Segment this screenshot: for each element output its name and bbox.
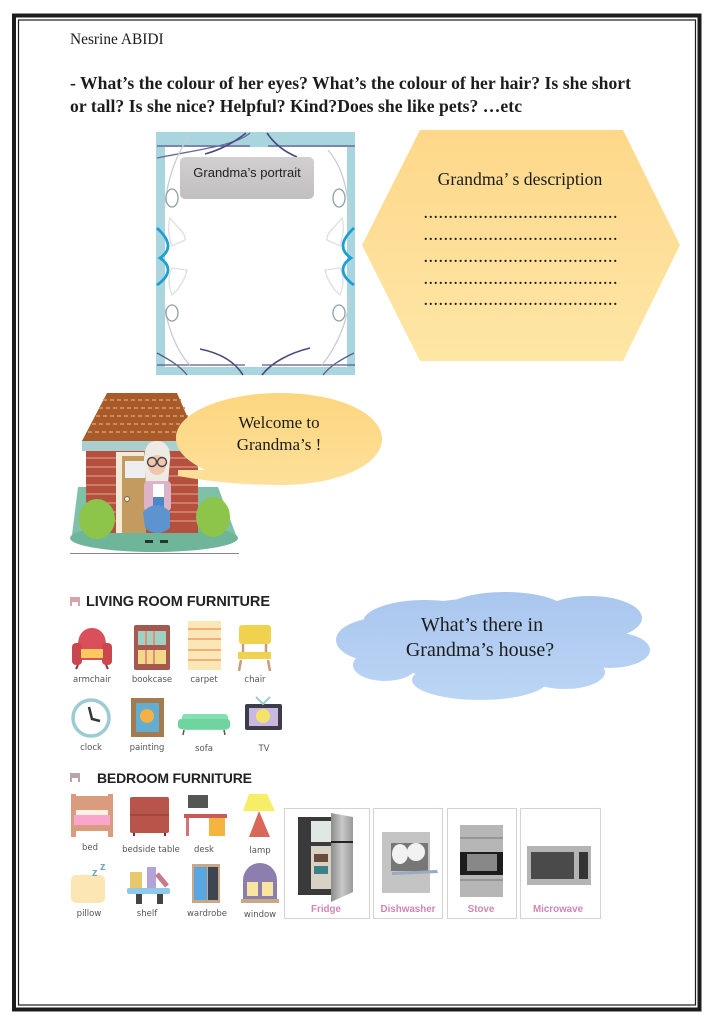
panel: grandma's description hexagon xyxy=(362,130,680,361)
author name: Nesrine ABIDI xyxy=(70,31,164,48)
illustration: grandma xyxy=(143,441,171,543)
panel: grandma's portrait frame xyxy=(156,132,355,375)
icon: bedside table xyxy=(130,797,169,836)
panel: bedroom items: lamp xyxy=(249,846,271,856)
panel: grandma's description hexagon: ....................................... xyxy=(424,229,617,244)
cloud: what's there: Grandma’s house? xyxy=(406,639,554,661)
panel: grandma's description hexagon: ....................................... xyxy=(424,294,617,309)
cloud: what's there xyxy=(336,592,650,700)
panel: living room items: clock xyxy=(80,743,102,753)
icon: bookcase xyxy=(134,625,170,670)
panel: fridge card: Fridge xyxy=(311,904,342,915)
panel: bedroom items: wardrobe xyxy=(187,909,227,919)
speech bubble: welcome: Grandma’s ! xyxy=(237,435,321,454)
icon: wardrobe xyxy=(192,864,220,903)
panel: grandma's description hexagon: ....................................... xyxy=(424,273,617,288)
icon: window xyxy=(241,863,279,903)
speech bubble: welcome: Welcome to xyxy=(238,413,320,432)
panel: dishwasher card xyxy=(374,808,442,918)
panel: living room items: sofa xyxy=(195,744,213,754)
question text: - What’s the colour of her eyes? What’s the colour of her hair? Is she short xyxy=(70,73,631,93)
panel: dishwasher card: Dishwasher xyxy=(380,904,436,915)
portrait label xyxy=(180,157,314,199)
icon: pillow: z xyxy=(92,867,98,879)
panel: bedroom items: desk xyxy=(194,845,214,855)
panel: bedroom items xyxy=(71,794,279,920)
panel: bedroom items: shelf xyxy=(137,909,158,919)
panel: grandma's description hexagon: ....................................... xyxy=(424,207,617,222)
panel: living room items: chair xyxy=(244,675,266,685)
icon: sofa xyxy=(178,714,230,735)
speech bubble: welcome xyxy=(176,393,382,485)
panel: stove card: Stove xyxy=(468,904,495,915)
icon: desk xyxy=(184,795,227,836)
icon: pillow: z xyxy=(100,861,106,873)
heading: bedroom furniture: BEDROOM FURNITURE xyxy=(97,770,252,786)
panel: bedroom items: bed xyxy=(82,843,98,853)
icon: shelf xyxy=(127,867,170,904)
panel: living room items: armchair xyxy=(73,675,111,685)
panel: bedroom items: window xyxy=(244,910,276,920)
panel: living room items: TV xyxy=(257,744,270,754)
icon: TV xyxy=(245,697,282,730)
icon: bed xyxy=(71,794,113,837)
panel: living room items: painting xyxy=(130,743,164,753)
portrait label: Grandma’s portrait xyxy=(193,165,301,180)
question text xyxy=(70,73,631,116)
panel: bedroom items: bedside table xyxy=(122,845,180,855)
icon: carpet xyxy=(188,621,221,670)
panel: fridge card xyxy=(284,808,370,918)
question text: or tall? Is she nice? Helpful? Kind?Does she like pets? …etc xyxy=(70,96,522,116)
panel: microwave card xyxy=(520,808,600,918)
cloud: what's there: What’s there in xyxy=(421,614,543,636)
panel: grandma's description hexagon: Grandma’ s description xyxy=(438,169,603,189)
panel: bedroom items: pillow xyxy=(77,909,101,919)
panel: microwave card: Microwave xyxy=(533,904,584,915)
icon: painting xyxy=(131,698,164,737)
icon: clock xyxy=(73,700,109,736)
icon: armchair xyxy=(72,628,112,669)
icon: chair xyxy=(238,625,271,671)
panel: grandma's description hexagon: ....................................... xyxy=(424,251,617,266)
panel: living room items: carpet xyxy=(190,675,218,685)
icon: pillow xyxy=(71,861,106,903)
panel: living room items xyxy=(72,621,282,754)
panel: living room items: bookcase xyxy=(132,675,172,685)
icon: lamp xyxy=(243,794,275,837)
heading: living room furniture: LIVING ROOM FURNITURE xyxy=(86,594,270,610)
panel: stove card xyxy=(448,808,516,918)
illustration: grandma and her house xyxy=(70,393,239,554)
